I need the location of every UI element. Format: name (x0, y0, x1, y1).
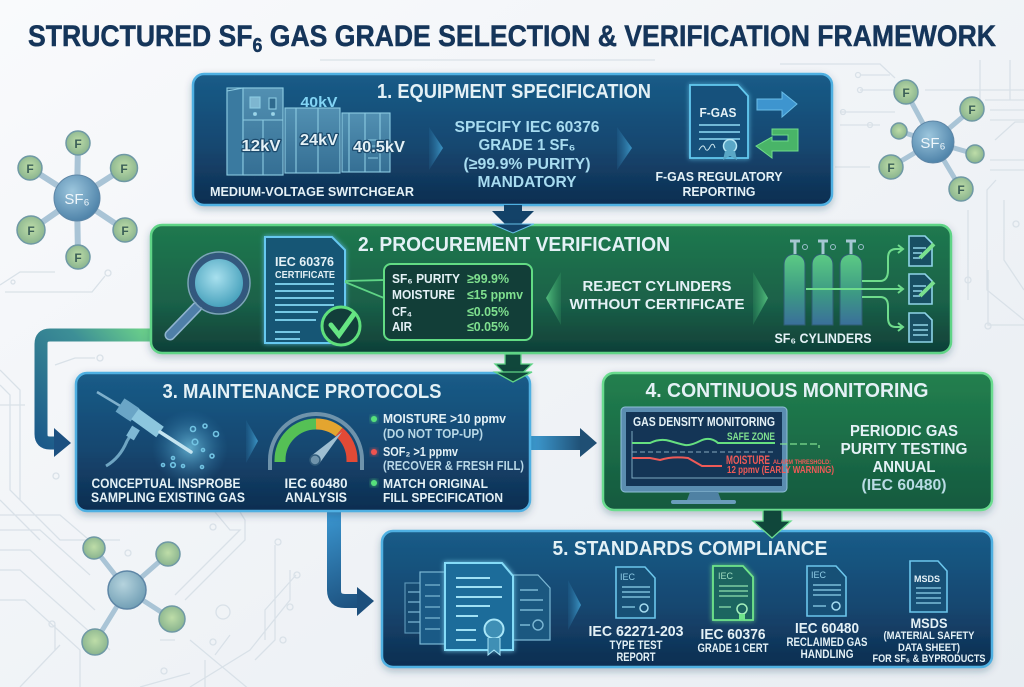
arrow: maintenance to monitoring (530, 428, 597, 457)
label: IEC 60376 grade 1 cert: GRADE 1 CERT (698, 641, 769, 655)
panel: 1. equipment specification (193, 74, 832, 205)
label: MSDS material safety data sheet: DATA SHEET) (898, 642, 960, 654)
text: periodic gas purity testing: (IEC 60480) (862, 477, 946, 494)
spec box: AIR (392, 319, 413, 334)
spec box: SF₆ PURITY (392, 271, 460, 286)
label: MSDS material safety data sheet: (MATERIAL SAFETY (884, 630, 975, 642)
label: 12kV: 12kV (242, 138, 281, 155)
status list: (RECOVER & FRESH FILL) (383, 458, 524, 473)
doc: MSDS: MSDS (914, 574, 940, 585)
label: F-gas regulatory reporting (656, 169, 783, 199)
heading: continuous monitoring: 4. CONTINUOUS MONITORING (646, 380, 928, 402)
icon: green check (322, 307, 360, 345)
arrow: maintenance to standards compliance (334, 510, 374, 616)
monitor: ALARM THRESHOLD: (773, 460, 831, 466)
chevron (568, 580, 581, 630)
molecule: SF6 top right: F (968, 103, 976, 117)
doc: IEC 60376 (713, 566, 753, 621)
text: reject cylinders: WITHOUT CERTIFICATE (570, 296, 744, 313)
label: IEC 60480 analysis: ANALYSIS (285, 489, 347, 505)
arrow: equipment to procurement (492, 205, 534, 232)
label: IEC 62271-203 type test report: IEC 62271-203 (588, 623, 684, 640)
doc: IEC 60376: IEC (718, 571, 734, 581)
molecule: SF6 top right: F (957, 183, 965, 197)
label: conceptual insprobe (91, 475, 245, 505)
label: IEC 60480 analysis (284, 475, 348, 505)
monitor (621, 407, 834, 504)
arrow: monitoring to standards compliance (753, 510, 791, 538)
label: IEC 60480 reclaimed gas handling: HANDLING (800, 647, 854, 661)
molecule: SF6 top left: F (74, 137, 82, 151)
label: MSDS material safety data sheet: MSDS (910, 615, 948, 631)
spec box: ≥99.9% (467, 271, 509, 286)
status list: (DO NOT TOP-UP) (383, 426, 483, 441)
icon: F-GAS document: F-GAS (700, 105, 737, 120)
text: specify IEC 60376: MANDATORY (478, 174, 577, 191)
spec box: ≤0.05% (467, 319, 509, 334)
chevron (429, 127, 443, 170)
label: conceptual insprobe: SAMPLING EXISTING GAS (91, 489, 245, 505)
chevron left (546, 272, 561, 325)
text: specify IEC 60376: (≥99.9% PURITY) (464, 156, 590, 173)
arrow: procurement to maintenance (495, 354, 532, 382)
icons: record documents (909, 236, 934, 342)
text: periodic gas purity testing: ANNUAL (872, 459, 936, 476)
text: reject cylinders (570, 278, 744, 313)
spec box: MOISTURE (392, 287, 455, 302)
molecule: SF6 top left: F (121, 224, 129, 238)
icon: inspection probe sampling gas (97, 392, 228, 486)
label: IEC 62271-203 type test report (588, 623, 684, 664)
panel: 4. continuous monitoring (603, 373, 992, 510)
text: periodic gas purity testing: PERIODIC GAS (850, 423, 958, 440)
molecule: SF6 top left (17, 131, 138, 269)
doc: IEC 60480 (807, 566, 846, 616)
molecule: bottom left (82, 537, 185, 655)
label: medium-voltage switchgear: MEDIUM-VOLTAGE SWITCHGEAR (210, 184, 415, 199)
title: 6 (253, 35, 262, 57)
label: F-gas regulatory reporting: REPORTING (682, 184, 756, 199)
molecule: SF6 top left: SF₆ (64, 191, 90, 208)
text: reject cylinders: REJECT CYLINDERS (582, 278, 732, 295)
arrows to documents (806, 245, 903, 331)
spec box: ≤0.05% (467, 304, 509, 319)
icon: IEC 60376 certificate (265, 237, 345, 343)
panel: 3. maintenance protocols (76, 372, 532, 511)
text: specify IEC 60376 (454, 119, 600, 191)
monitor: MOISTURE (726, 455, 770, 467)
chevron right (753, 272, 768, 325)
molecule: SF6 top left: F (27, 224, 35, 238)
icon: IEC 60376 certificate: CERTIFICATE (275, 270, 335, 281)
heading: procurement verification: 2. PROCUREMENT VERIFICATION (358, 234, 670, 256)
spec box (384, 264, 532, 340)
chevron (246, 420, 258, 463)
icon: switchgear cabinets (227, 88, 390, 175)
doc: IEC 62271-203: IEC (620, 572, 636, 582)
heading: equipment specification: 1. EQUIPMENT SPECIFICATION (377, 81, 651, 103)
label: MSDS material safety data sheet (872, 615, 986, 665)
text: periodic gas purity testing: PURITY TESTING (840, 441, 968, 458)
doc: MSDS (910, 561, 947, 612)
heading: maintenance protocols: 3. MAINTENANCE PROTOCOLS (162, 381, 442, 403)
spec box: CF₄ (392, 304, 412, 319)
icon: blue arrow (757, 92, 797, 117)
title: STRUCTURED SF (28, 20, 281, 53)
heading: standards compliance: 5. STANDARDS COMPLIANCE (552, 538, 828, 560)
label: 40.5kV: 40.5kV (353, 139, 405, 156)
doc: IEC 62271-203 (616, 567, 655, 618)
status list (371, 411, 524, 505)
molecule: SF6 top right: F (887, 161, 895, 175)
molecule: SF6 top left: F (26, 162, 34, 176)
icon: green return arrow (756, 129, 798, 158)
label: IEC 62271-203 type test report: TYPE TEST (610, 638, 663, 652)
text: specify IEC 60376: SPECIFY IEC 60376 (454, 119, 600, 136)
label: IEC 60480 reclaimed gas handling (786, 620, 868, 661)
connector (345, 280, 384, 298)
monitor: 12 ppmv (EARLY WARNING) (727, 464, 834, 476)
molecule: SF6 top left: F (120, 162, 128, 176)
label: 24kV: 24kV (300, 132, 338, 149)
icon: IEC 60376 certificate: IEC 60376 (275, 254, 334, 269)
spec box: ≤15 ppmv (467, 287, 524, 302)
arrow: procurement to maintenance, left route (41, 335, 152, 457)
label: IEC 60480 analysis: IEC 60480 (284, 475, 348, 491)
label: IEC 60480 reclaimed gas handling: IEC 60480 (795, 620, 859, 637)
status list: MATCH ORIGINAL (383, 476, 488, 491)
text: periodic gas purity testing (840, 423, 968, 494)
gauge (270, 414, 362, 470)
molecule: SF6 top right: F (902, 86, 910, 100)
panel: 5. standards compliance (382, 531, 992, 667)
label: IEC 60480 reclaimed gas handling: RECLAIMED GAS (786, 635, 868, 649)
label: IEC 62271-203 type test report: REPORT (616, 650, 656, 664)
label: SF6 cylinders: SF₆ CYLINDERS (774, 331, 872, 346)
molecule: SF6 top right (879, 80, 984, 201)
label: IEC 60376 grade 1 cert (698, 626, 769, 655)
label: MSDS material safety data sheet: FOR SF₆ & BYPRODUCTS (872, 653, 986, 665)
status list: SOF₂ >1 ppmv (383, 444, 459, 459)
monitor: GAS DENSITY MONITORING (633, 415, 775, 429)
monitor: SAFE ZONE (727, 431, 775, 443)
label: F-gas regulatory reporting: F-GAS REGULATORY (656, 169, 783, 184)
icon: stack of certificates (405, 563, 550, 655)
icon: F-GAS document (690, 85, 748, 160)
icon: magnifying glass (170, 252, 250, 335)
status list: MOISTURE >10 ppmv (383, 411, 507, 426)
panel: 2. procurement verification (151, 224, 951, 353)
doc: IEC 60480: IEC (811, 570, 827, 580)
label: conceptual insprobe: CONCEPTUAL INSPROBE (92, 475, 240, 491)
molecule: SF6 top right: SF₆ (920, 135, 946, 152)
text: specify IEC 60376: GRADE 1 SF₆ (478, 137, 576, 154)
status list: FILL SPECIFICATION (383, 490, 503, 505)
label: 40kV: 40kV (300, 94, 338, 111)
icon: SF6 cylinders (784, 241, 864, 325)
molecule: SF6 top left: F (74, 251, 82, 265)
label: IEC 60376 grade 1 cert: IEC 60376 (700, 626, 766, 643)
chevron (617, 127, 632, 170)
